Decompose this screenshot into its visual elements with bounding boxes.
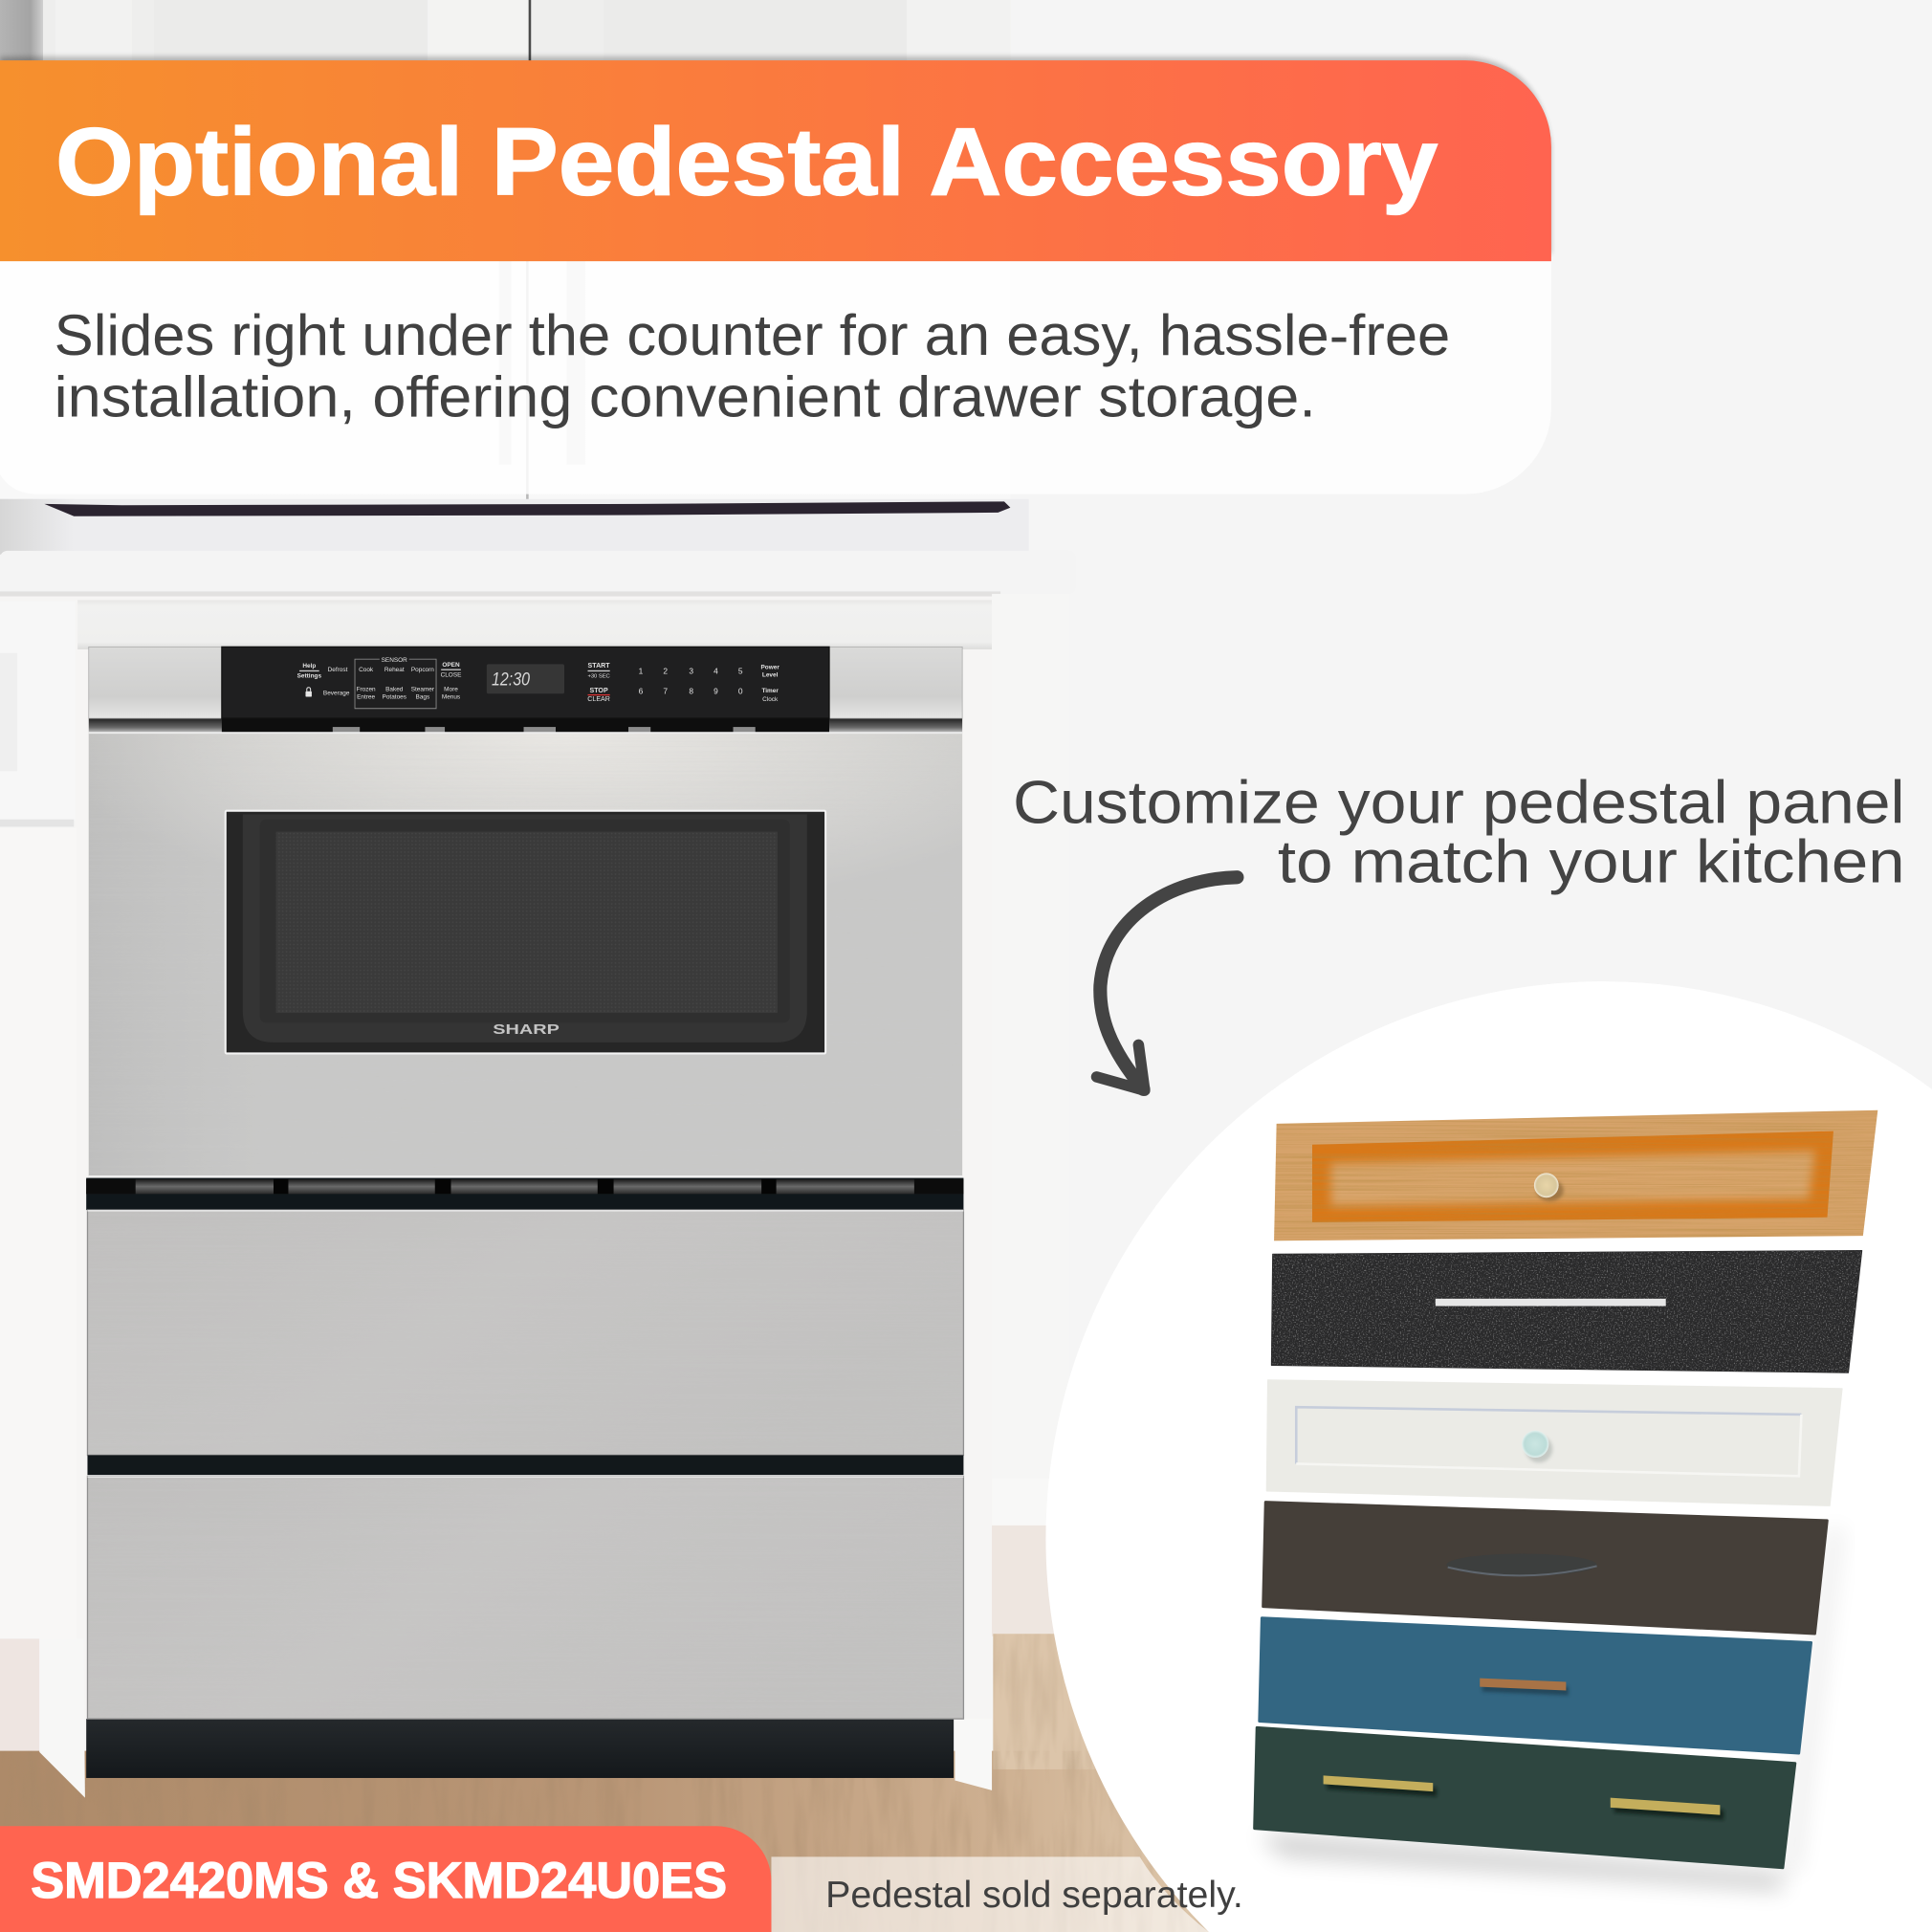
panel swatches stack <box>1254 1110 1877 1890</box>
subtitle text: installation, offering convenient drawer storage. <box>55 363 1316 428</box>
control panel: Level <box>762 671 779 678</box>
control panel: More <box>444 687 458 693</box>
model number badge <box>0 1826 771 1932</box>
control panel: +30 SEC <box>587 674 610 680</box>
control panel: 0 <box>738 686 743 695</box>
control panel: 3 <box>689 667 693 676</box>
control panel: Timer <box>761 688 779 694</box>
control panel: Frozen <box>357 687 376 693</box>
control panel: Help <box>302 663 316 670</box>
control panel: Popcorn <box>411 667 434 673</box>
clock display <box>487 664 564 693</box>
customize callout text: Customize your pedestal panel <box>1013 770 1905 837</box>
left trim <box>89 647 222 718</box>
control panel: Beverage <box>323 691 350 697</box>
pedestal lower drawer <box>87 1476 963 1719</box>
control panel: Potatoes <box>383 693 406 700</box>
control panel: Entree <box>357 693 376 700</box>
control panel: Bags <box>416 693 429 700</box>
subtitle text <box>55 302 1450 428</box>
cup handle <box>1446 1554 1597 1576</box>
swatch: granite panel <box>1271 1251 1862 1372</box>
control panel: OPEN <box>442 662 460 669</box>
dark gap above pedestal <box>86 1178 963 1210</box>
customize callout text: to match your kitchen <box>1278 828 1905 895</box>
control panel: 7 <box>663 686 668 695</box>
control panel: 5 <box>738 667 743 676</box>
swatch: blue panel <box>1260 1617 1811 1753</box>
control panel: Clock <box>762 696 779 703</box>
knob <box>1534 1173 1564 1201</box>
control panel: 4 <box>714 667 718 676</box>
microwave stainless front <box>89 734 962 1177</box>
subtitle text: Slides right under the counter for an easy, hassle-free <box>55 302 1450 367</box>
clock display: 12:30 <box>492 670 530 690</box>
brass handle left <box>1324 1775 1437 1796</box>
SHARP logo: SHARP <box>493 1022 560 1038</box>
pedestal upper drawer <box>87 1210 963 1475</box>
swatch: wood panel <box>1274 1110 1877 1240</box>
swatch: green panel <box>1254 1727 1795 1868</box>
control panel: Steamer <box>411 687 435 693</box>
control panel: Reheat <box>384 667 405 673</box>
icon: lock <box>305 688 312 697</box>
customize callout text <box>1013 770 1905 895</box>
pedestal toe kick <box>86 1719 954 1778</box>
title text: Optional Pedestal Accessory <box>55 109 1438 216</box>
control panel: Baked <box>385 687 404 693</box>
right trim <box>829 647 962 718</box>
model number text: SMD2420MS & SKMD24U0ES <box>31 1853 727 1909</box>
arrow: curved pointer to panels <box>1097 877 1237 1090</box>
control panel <box>222 647 829 718</box>
control panel: START <box>588 662 610 670</box>
control panel: 6 <box>639 686 644 695</box>
control panel: 2 <box>663 667 668 676</box>
subtitle panel <box>0 261 1551 494</box>
bar handle <box>1436 1299 1666 1306</box>
control panel: STOP <box>590 687 608 694</box>
brass handle right <box>1611 1798 1723 1820</box>
footer note band <box>771 1856 1243 1932</box>
control panel: 8 <box>689 686 693 695</box>
control panel: Cook <box>359 667 374 673</box>
control panel: Menus <box>442 693 460 700</box>
control panel: Settings <box>297 673 321 680</box>
control panel: Power <box>761 665 779 671</box>
knob <box>1522 1431 1552 1462</box>
title banner <box>0 56 1551 261</box>
control panel: 9 <box>714 686 718 695</box>
swatch: white shaker panel <box>1266 1380 1842 1505</box>
copper handle <box>1480 1679 1569 1696</box>
microwave drawer with pedestal appliance <box>86 647 963 1778</box>
control panel: SENSOR <box>382 657 407 664</box>
text: pedestal sold separately: Pedestal sold separately. <box>825 1875 1243 1916</box>
gap below control panel <box>89 718 962 734</box>
control panel: 1 <box>639 667 644 676</box>
control panel: Defrost <box>328 667 348 673</box>
microwave window <box>226 811 825 1053</box>
swatch: charcoal panel <box>1262 1502 1827 1634</box>
control panel: CLOSE <box>441 671 462 678</box>
control panel: CLEAR <box>587 695 610 703</box>
panel: white circle with panel swatches background <box>1045 981 1932 1932</box>
